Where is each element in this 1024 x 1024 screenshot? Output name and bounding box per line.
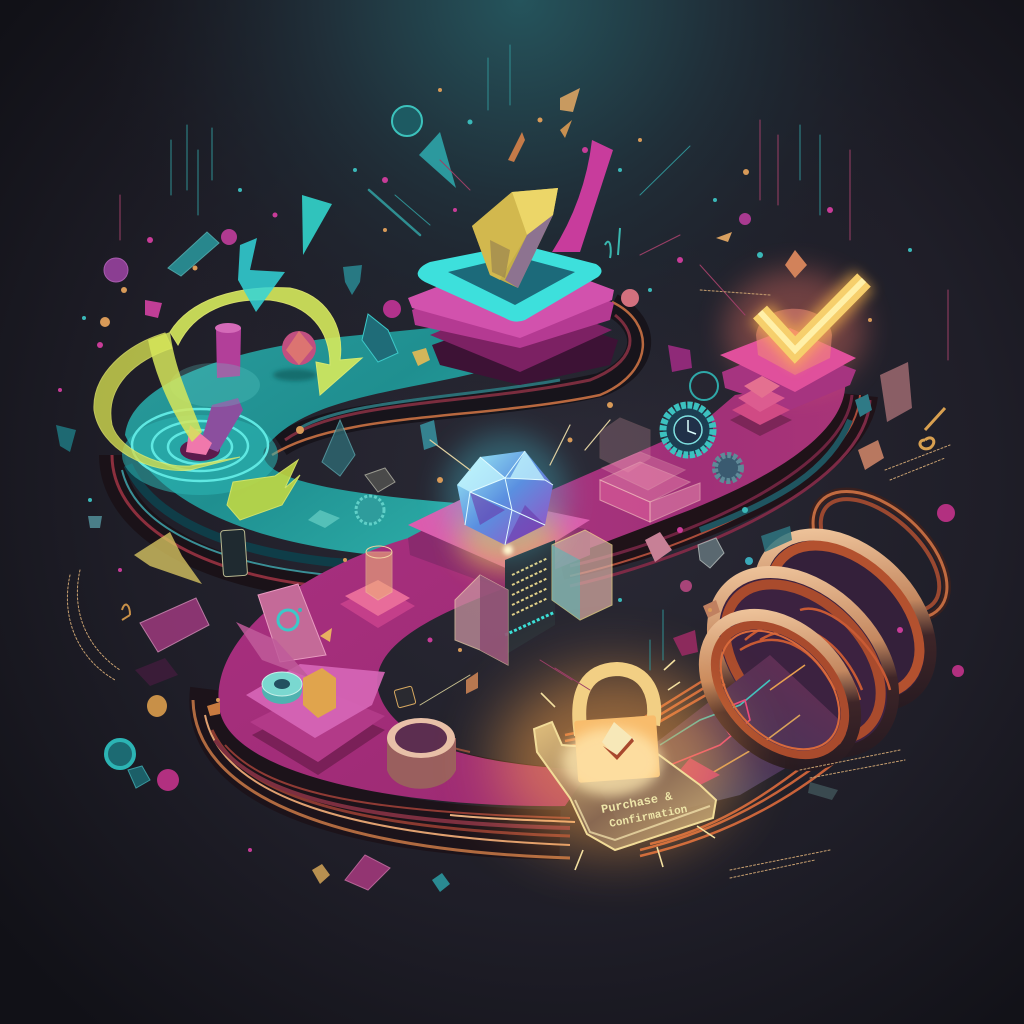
ring: second (678, 537, 928, 787)
icon: server tower (505, 540, 555, 655)
icon: green folded shard (227, 460, 300, 520)
icon: vortex with crystal and arrows (94, 238, 362, 495)
icon: glass dome (756, 309, 832, 375)
icon: glass block left (455, 575, 508, 665)
icon: teal lightning shard (238, 238, 285, 312)
base (534, 722, 716, 850)
icon: small spire (785, 250, 807, 278)
icon: teal disc (262, 672, 302, 704)
icon: small gear (715, 455, 741, 481)
icons: light rays around lock (541, 660, 715, 870)
panel: lower left stack (236, 584, 385, 775)
label: purchase and confirmation (600, 789, 689, 831)
icon: glass block right (552, 530, 612, 620)
teal top layer (418, 245, 602, 322)
panel: magenta upper track surface (530, 378, 845, 548)
icon: glass cubes stack (600, 418, 700, 522)
panel: magenta lower track surface (218, 532, 590, 806)
icon: check mark (760, 280, 864, 350)
label: purchase and confirmation: Purchase & (600, 789, 674, 817)
ring: far (790, 467, 970, 643)
chart: particle dots (58, 88, 912, 852)
icon: clock gear (663, 405, 713, 455)
lock body (562, 715, 662, 796)
icon: small glowing stack (340, 546, 415, 628)
small pink stack (730, 376, 792, 436)
panel: copper coil back rings (678, 467, 970, 787)
arrow: outer yellow loop (94, 333, 240, 470)
panel: teal track surface (125, 326, 480, 560)
icon: amber cube (303, 668, 336, 718)
icon: cylinder (215, 323, 241, 378)
panel: magenta lower track rails (193, 610, 575, 858)
panel: top stack (408, 140, 618, 385)
icon: pink ribbon behind crystal (552, 140, 613, 252)
icon: yellow crystal (472, 188, 558, 288)
ring: third (726, 501, 964, 739)
panel: padlock and base (495, 669, 735, 850)
panel: copper coil near ring (675, 585, 885, 795)
panel: magenta upper track rails (560, 395, 870, 586)
label: purchase and confirmation: Confirmation (608, 804, 689, 831)
chart: floating glass shards top and left (56, 88, 639, 528)
ring: inner strands (740, 609, 890, 700)
panel: central platform (408, 433, 612, 665)
icon: faceted gem (443, 433, 567, 557)
icon: cylinder drum (387, 718, 456, 789)
panel: check stack (720, 250, 865, 436)
arrow: yellow curve into vortex (148, 332, 202, 442)
chart: floating objects right (394, 213, 964, 800)
chart: floating objects lower left (106, 529, 450, 892)
icon: faceted sphere (282, 331, 316, 365)
panel: teal track lower rails (112, 302, 643, 592)
panel: glass tube (565, 655, 850, 856)
shackle (579, 669, 654, 735)
arrow: upper green curve (170, 288, 362, 395)
icon: card (258, 584, 326, 662)
chart: thin data lines and particles (67, 45, 950, 878)
